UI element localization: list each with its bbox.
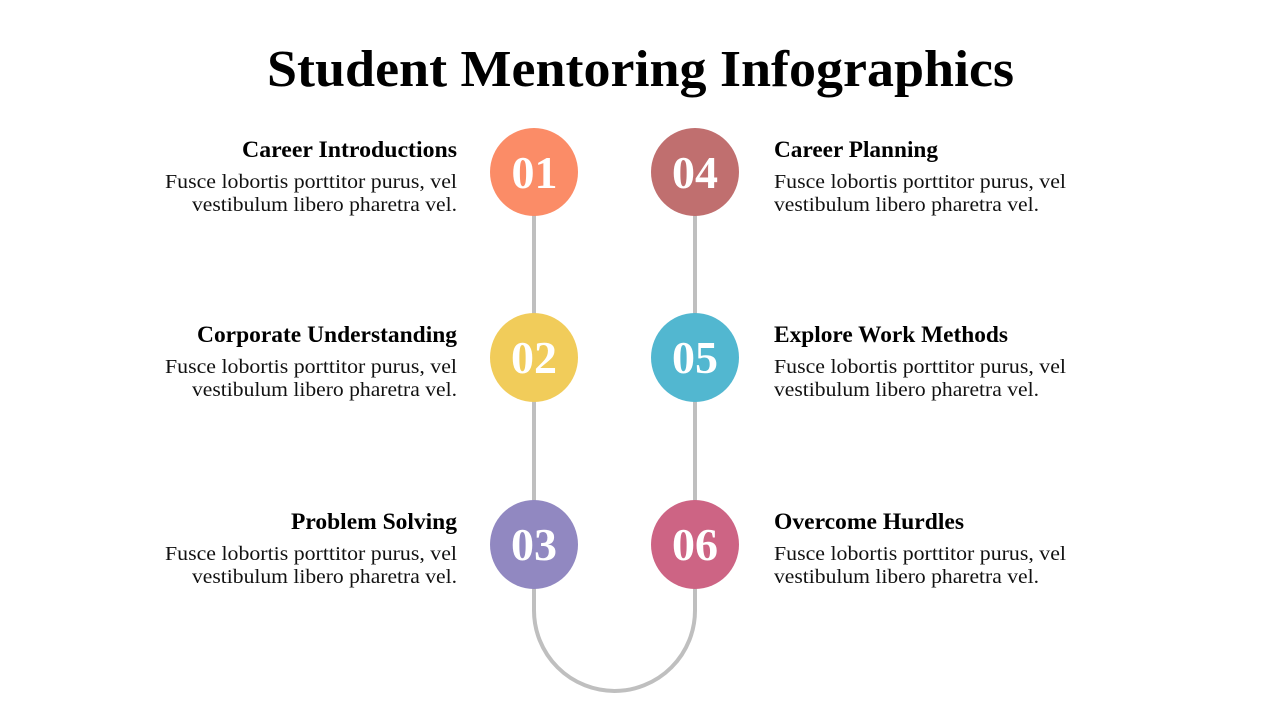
description <box>774 171 1066 216</box>
heading: Problem Solving <box>291 509 457 535</box>
description <box>774 356 1066 401</box>
number badge 05 <box>651 313 739 402</box>
item 05: Explore Work Methods <box>651 313 1066 402</box>
item 01: Career Introductions <box>165 128 578 216</box>
description: Fusce lobortis porttitor purus, vel <box>774 543 1066 565</box>
description: Fusce lobortis porttitor purus, vel <box>165 543 457 565</box>
item 03: Problem Solving <box>165 500 578 589</box>
description: vestibulum libero pharetra vel. <box>192 566 457 588</box>
description: Fusce lobortis porttitor purus, vel <box>774 171 1066 193</box>
item 02: Corporate Understanding <box>165 313 578 402</box>
heading: Explore Work Methods <box>774 322 1008 348</box>
number badge 05: 05 <box>672 332 718 383</box>
description <box>774 543 1066 588</box>
description <box>165 543 457 588</box>
number badge 03: 03 <box>511 519 557 570</box>
description: vestibulum libero pharetra vel. <box>774 566 1039 588</box>
number badge 01: 01 <box>512 147 558 198</box>
number badge 01 <box>490 128 578 216</box>
description: Fusce lobortis porttitor purus, vel <box>165 171 457 193</box>
title: Student Mentoring Infographics <box>267 41 1014 98</box>
description: Fusce lobortis porttitor purus, vel <box>165 356 457 378</box>
number badge 06: 06 <box>672 519 718 570</box>
number badge 02 <box>490 313 578 402</box>
item 06: Overcome Hurdles <box>651 500 1066 589</box>
heading: Corporate Understanding <box>197 322 457 348</box>
heading: Career Planning <box>774 137 938 163</box>
number badge 06 <box>651 500 739 589</box>
description: vestibulum libero pharetra vel. <box>774 194 1039 216</box>
number badge 04: 04 <box>672 147 718 198</box>
heading: Overcome Hurdles <box>774 509 964 535</box>
item 04: Career Planning <box>651 128 1066 216</box>
description <box>165 356 457 401</box>
number badge 04 <box>651 128 739 216</box>
description: vestibulum libero pharetra vel. <box>192 379 457 401</box>
description <box>165 171 457 216</box>
connector line <box>534 172 695 691</box>
description: Fusce lobortis porttitor purus, vel <box>774 356 1066 378</box>
description: vestibulum libero pharetra vel. <box>774 379 1039 401</box>
description: vestibulum libero pharetra vel. <box>192 194 457 216</box>
heading: Career Introductions <box>242 137 457 163</box>
number badge 02: 02 <box>511 332 557 383</box>
number badge 03 <box>490 500 578 589</box>
